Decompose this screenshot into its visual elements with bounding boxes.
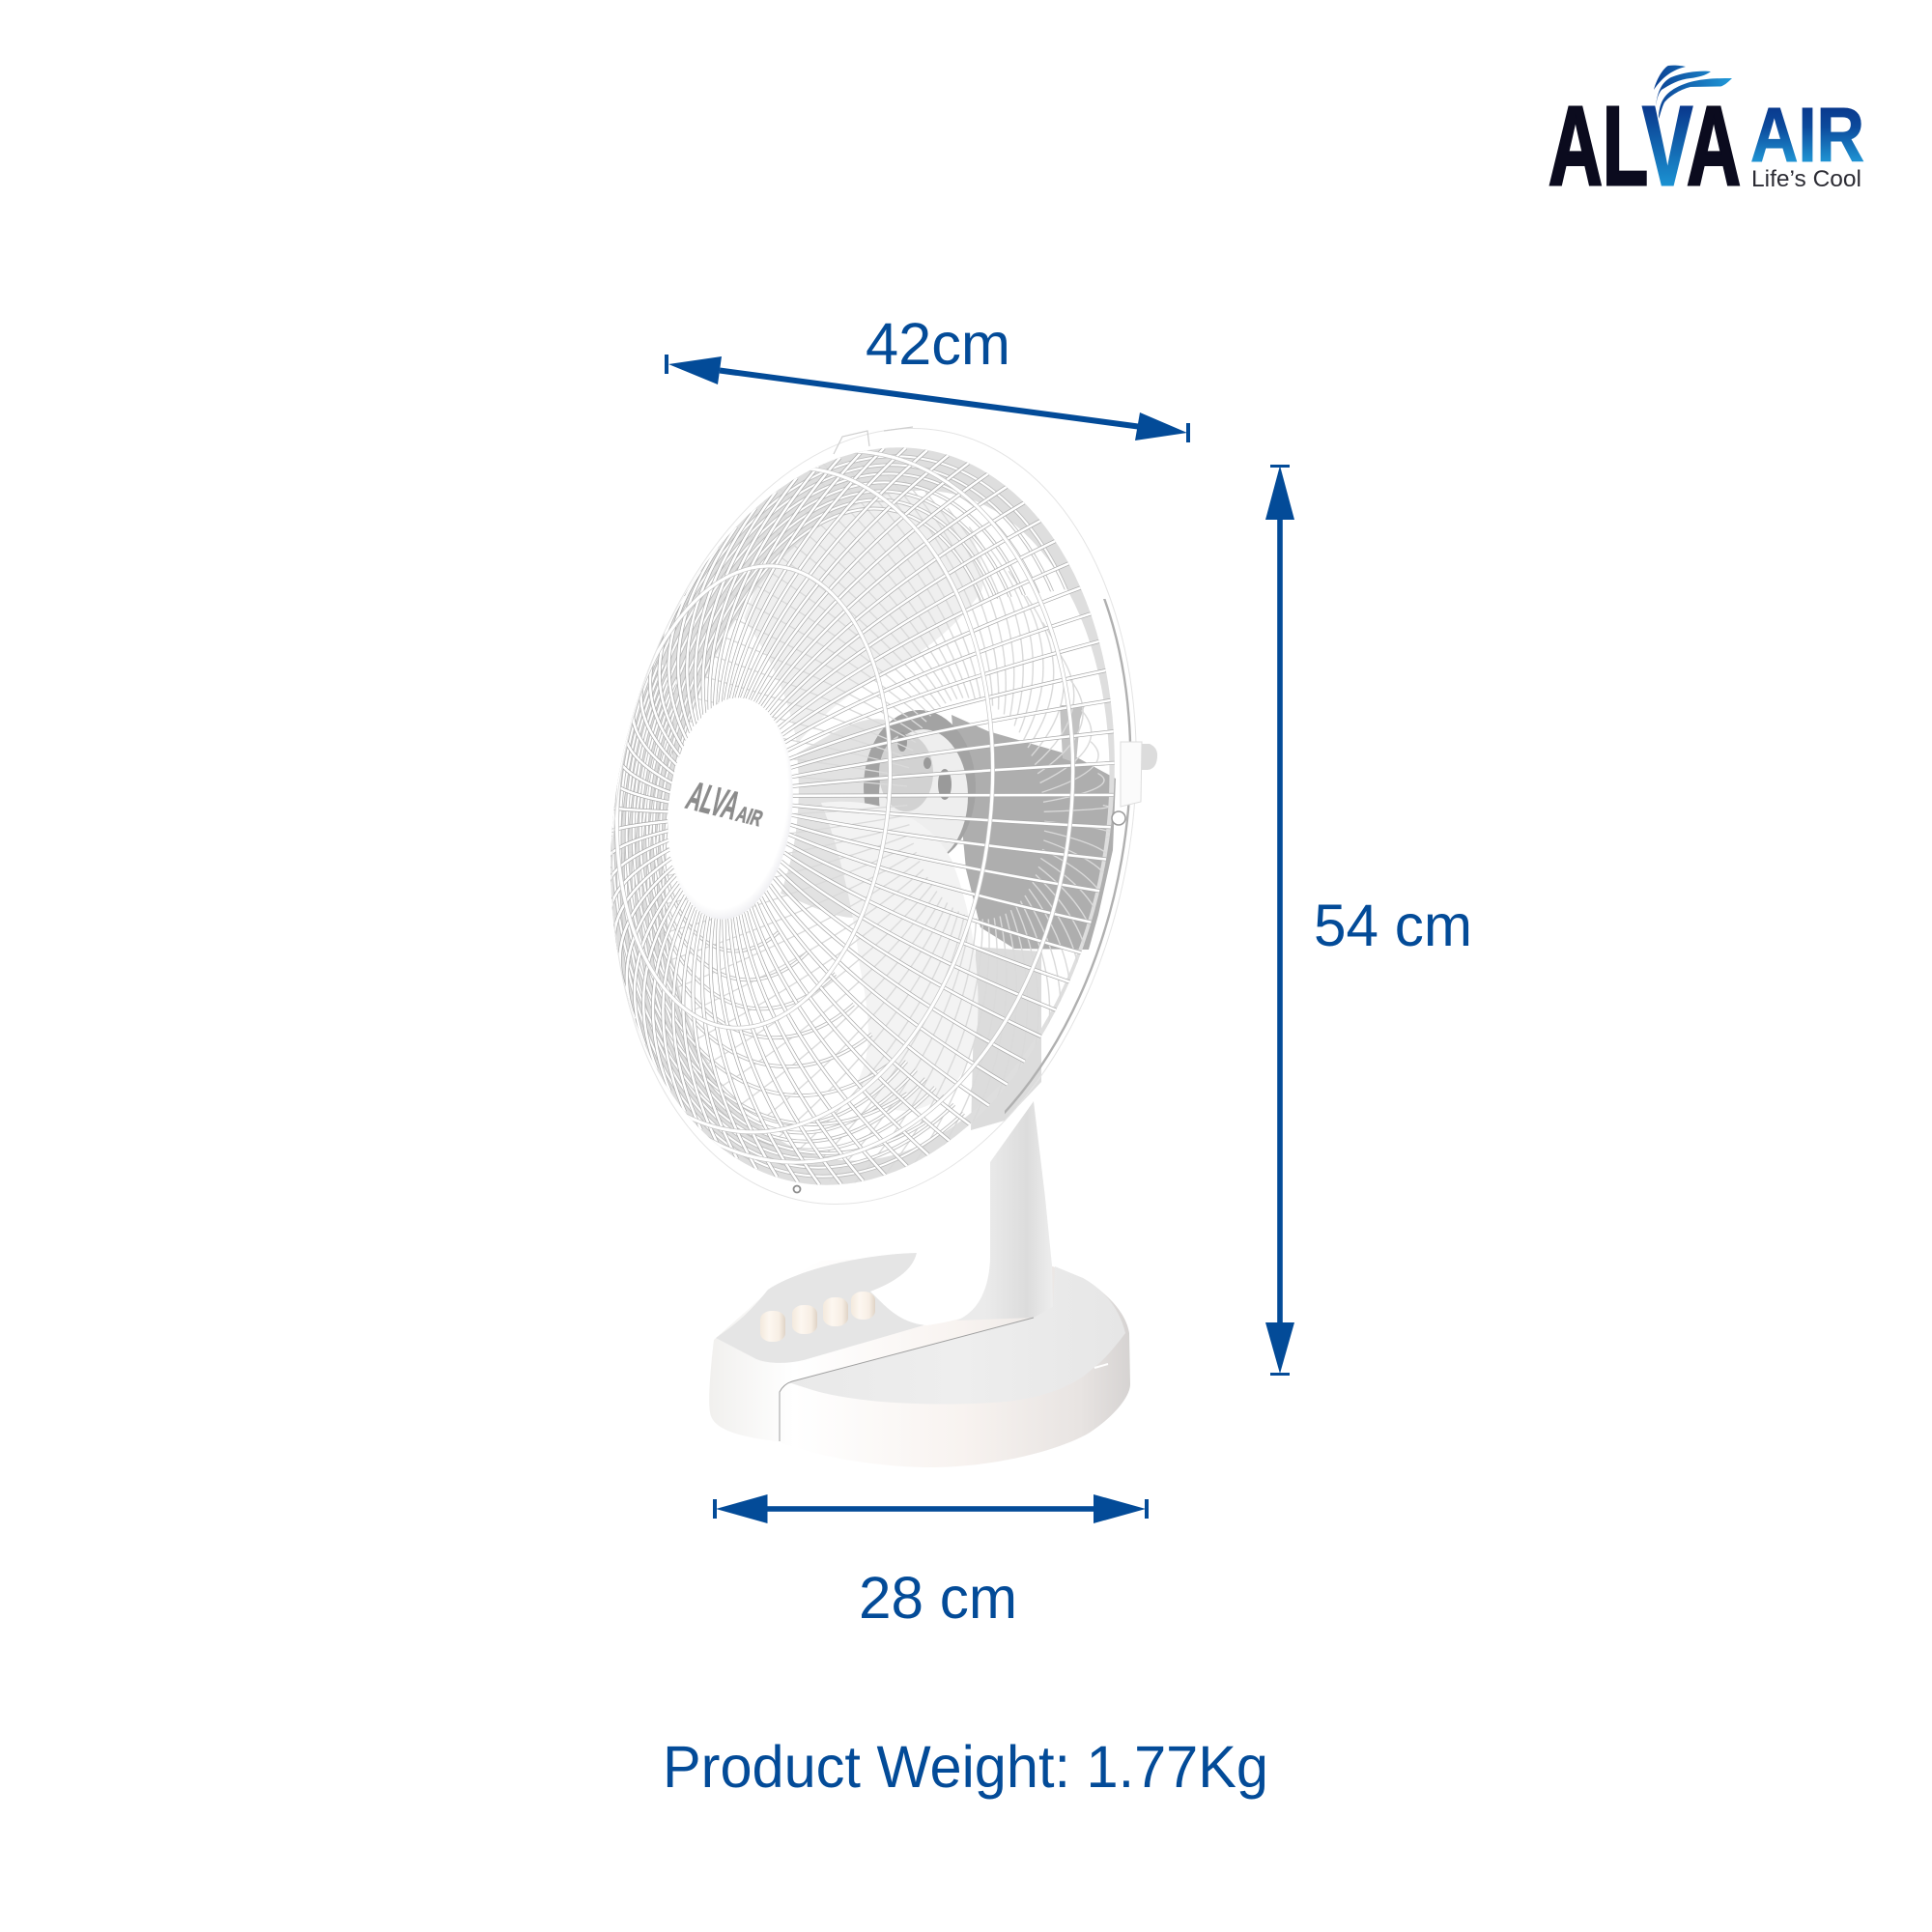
logo tagline: Life’s Cool [1751, 166, 1861, 192]
logo wordmark ALVA: ALVA [1548, 83, 1741, 209]
base side wall [709, 1256, 1130, 1467]
side clasp [1112, 742, 1157, 825]
neck shaded side [956, 1101, 1053, 1321]
rear bracket top [1060, 705, 1085, 763]
bottom screw [794, 1186, 800, 1192]
cage shading band around dome edge [554, 407, 1171, 1226]
button 4 [851, 1292, 875, 1320]
front cage radial wires [607, 448, 1115, 1184]
label: 42cm: 42cm [866, 311, 1010, 377]
motor dark ring [864, 710, 976, 865]
logo swoosh feathers [1654, 66, 1732, 119]
panel seam line [780, 1318, 1034, 1441]
rim disc backing [554, 386, 1195, 1246]
motor holes [897, 732, 952, 800]
arrow: base width dimension [713, 1494, 1149, 1523]
base highlight glint [1094, 1364, 1108, 1368]
hub logo: AIR [733, 801, 767, 831]
button 1 [760, 1311, 785, 1342]
upper blade [744, 474, 983, 744]
motor inner recess [879, 734, 933, 811]
center hub [657, 692, 804, 925]
stand and base of fan [709, 1101, 1130, 1467]
fan head [611, 427, 1157, 1205]
arrow: fan width dimension [665, 355, 1190, 442]
top clip tab [834, 427, 913, 454]
rear cage wires [667, 464, 1111, 1182]
neck front flare [870, 1159, 1026, 1325]
front cage fine rings outer [616, 454, 1068, 1179]
motor white disc [879, 729, 968, 863]
label: 28 cm: 28 cm [859, 1565, 1017, 1631]
arrow: fan height dimension [1265, 465, 1294, 1376]
rim outline [554, 386, 1195, 1246]
label: product weight: Product Weight: 1.77Kg [663, 1734, 1268, 1800]
rear housing dark plate [952, 715, 1116, 950]
shaded zone behind hub [781, 719, 918, 918]
control panel plate [716, 1253, 923, 1363]
front cage structural rings [614, 450, 1075, 1165]
lower blade [821, 802, 979, 1111]
button 3 [823, 1297, 848, 1326]
label: 54 cm: 54 cm [1314, 893, 1472, 958]
front cage fine rings lower [611, 659, 925, 1155]
hub logo: ALVA [681, 774, 747, 828]
rim shaded line [1005, 599, 1132, 1115]
logo: Alva Air [1548, 66, 1864, 209]
logo wordmark AIR: AIR [1750, 92, 1864, 178]
base top surface [788, 1266, 1125, 1405]
button 2 [792, 1305, 817, 1334]
neck seen through cage [971, 947, 1041, 1130]
